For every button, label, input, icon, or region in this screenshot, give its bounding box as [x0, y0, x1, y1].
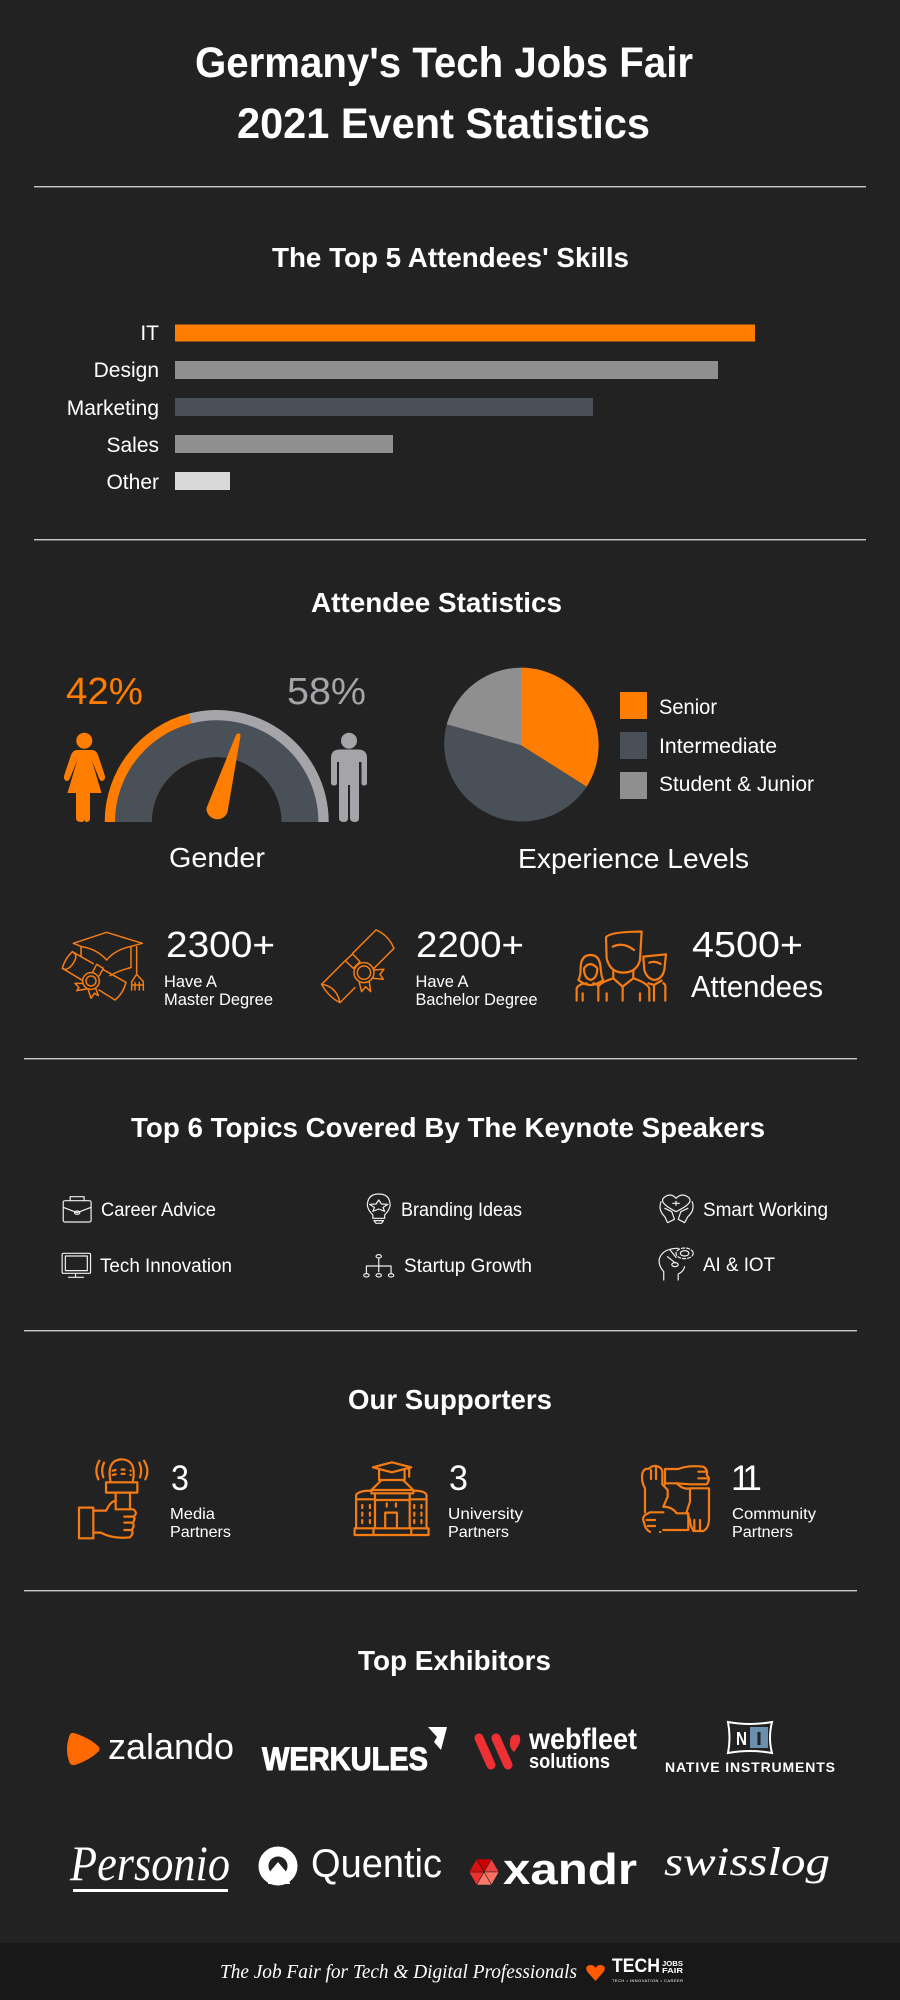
logo: webfleet: solutions: [529, 1751, 610, 1773]
logo: native instruments: N: [736, 1729, 747, 1749]
logo: swisslog: swisslog: [664, 1839, 830, 1884]
heading: attendee statistics: Attendee Statistics: [311, 587, 562, 618]
stat: master degree: Master Degree: [164, 990, 273, 1009]
bar: Marketing: [67, 397, 593, 420]
title: 2021 Event Statistics: [237, 100, 650, 148]
topic: AI and IOT: [659, 1248, 775, 1280]
supporter: media partners: 3: [171, 1459, 189, 1498]
gender gauge: 58%: [287, 671, 366, 713]
bar: IT: IT: [140, 322, 159, 345]
icon: heart: [586, 1965, 605, 1981]
icon: hand holding microphone: [79, 1459, 147, 1538]
bar: Sales: [106, 434, 393, 457]
bar: Design: Design: [94, 359, 159, 382]
logo: webfleet: [479, 1723, 637, 1773]
icon: diploma: [322, 930, 394, 1003]
topic: tech innovation: [62, 1253, 232, 1277]
logo: tech jobs fair: JOBS: [662, 1961, 683, 1968]
bar: IT: [140, 322, 755, 345]
supporter: university partners: 3: [449, 1459, 468, 1498]
panel: skills bar chart: [67, 242, 755, 494]
stat: bachelor degree: 2200+: [416, 924, 524, 965]
bar: Sales: Sales: [106, 434, 159, 457]
logo: tech jobs fair: FAIR: [662, 1966, 684, 1975]
bar: Other: Other: [106, 471, 159, 494]
legend: Senior: [659, 696, 717, 719]
title: [195, 39, 693, 148]
legend: [620, 692, 814, 799]
topic: career advice: Career Advice: [101, 1200, 216, 1221]
bar: Marketing: Marketing: [67, 397, 159, 420]
icon: light bulb with star: [367, 1194, 390, 1223]
topic: smart working: [660, 1195, 828, 1223]
logo: native instruments: NATIVE INSTRUMENTS: [665, 1759, 835, 1775]
logo: tech jobs fair: TECH • INNOVATION • CAREER: [612, 1978, 683, 1983]
logo: native instruments: [665, 1722, 835, 1775]
panel: supporters: [79, 1384, 816, 1541]
bar: Design: [94, 359, 718, 382]
bar: Other: [106, 471, 230, 494]
icon: briefcase: [63, 1197, 91, 1222]
supporter: community partners: Community: [732, 1506, 816, 1523]
stat: attendees: Attendees: [691, 969, 823, 1004]
topic: smart working: Smart Working: [703, 1200, 828, 1221]
icon: hands holding heart: [660, 1195, 693, 1223]
panel: top exhibitors: [67, 1645, 835, 1894]
stat: bachelor degree: Bachelor Degree: [416, 990, 538, 1009]
logo: xandr: xandr: [503, 1845, 637, 1894]
supporter: community partners: Partners: [732, 1524, 793, 1541]
heading: supporters: Our Supporters: [348, 1384, 552, 1415]
topic: career advice: [63, 1197, 216, 1222]
logo: native instruments: I: [756, 1729, 762, 1749]
supporter: media partners: [79, 1459, 231, 1541]
heading: topics: Top 6 Topics Covered By The Keynote Speakers: [131, 1112, 765, 1143]
title: Germany's Tech Jobs Fair: [195, 39, 693, 87]
logo: tech jobs fair: TECH: [612, 1956, 660, 1977]
stat: attendees: [577, 924, 823, 1004]
stat: master degree: [62, 924, 275, 1009]
stat: bachelor degree: Have A: [416, 972, 469, 991]
logo: zalando: zalando: [108, 1726, 234, 1767]
supporter: university partners: [355, 1459, 523, 1541]
icon: woman: [64, 733, 105, 822]
supporter: community partners: 11: [731, 1459, 760, 1498]
legend: Student & Junior: [659, 773, 814, 796]
panel: attendee statistics: [62, 587, 823, 1009]
label: experience levels: Experience Levels: [518, 843, 749, 874]
topic: branding ideas: Branding Ideas: [401, 1200, 522, 1221]
stat: attendees: 4500+: [692, 924, 803, 965]
gauge needle: [206, 733, 240, 819]
logo: tech jobs fair: [612, 1956, 684, 1983]
icon: university building: [355, 1462, 429, 1535]
stat: bachelor degree: [322, 924, 538, 1009]
icon: group of people: [577, 932, 666, 1001]
footer tagline: The Job Fair for Tech & Digital Professionals: [220, 1961, 577, 1983]
supporter: community partners: [642, 1459, 816, 1541]
icon: man: [331, 733, 367, 822]
supporter: media partners: Partners: [170, 1524, 231, 1541]
logo: werkules: WERKULES: [262, 1741, 428, 1777]
icon: head with gears: [659, 1248, 693, 1280]
experience pie chart: [444, 668, 814, 874]
heading: exhibitors: Top Exhibitors: [358, 1645, 551, 1676]
gender gauge: [64, 671, 367, 873]
icon: org chart: [364, 1255, 394, 1277]
supporter: media partners: Media: [170, 1506, 215, 1523]
stat: master degree: 2300+: [166, 924, 275, 965]
icon: graduation cap and diploma: [62, 932, 143, 1000]
legend: Intermediate: [659, 735, 777, 758]
stat: master degree: Have A: [164, 972, 218, 991]
topic: branding ideas: [367, 1194, 522, 1223]
supporter: university partners: University: [448, 1506, 523, 1523]
icon: monitor: [62, 1253, 91, 1277]
label: gender: Gender: [169, 842, 265, 873]
heading: skills: The Top 5 Attendees' Skills: [272, 242, 629, 273]
panel: keynote topics: [62, 1112, 828, 1280]
logo: webfleet: webfleet: [528, 1723, 637, 1756]
footer band: [0, 1943, 900, 2000]
topic: tech innovation: Tech Innovation: [100, 1256, 232, 1277]
logo: quentic: Quentic: [311, 1842, 442, 1886]
supporter: university partners: Partners: [448, 1524, 509, 1541]
gender gauge: 42%: [66, 671, 143, 713]
topic: AI and IOT: AI & IOT: [703, 1255, 775, 1276]
icon: four interlocking hands: [642, 1466, 709, 1532]
topic: startup growth: Startup Growth: [404, 1256, 532, 1277]
logo: personio: Personio: [69, 1835, 230, 1891]
